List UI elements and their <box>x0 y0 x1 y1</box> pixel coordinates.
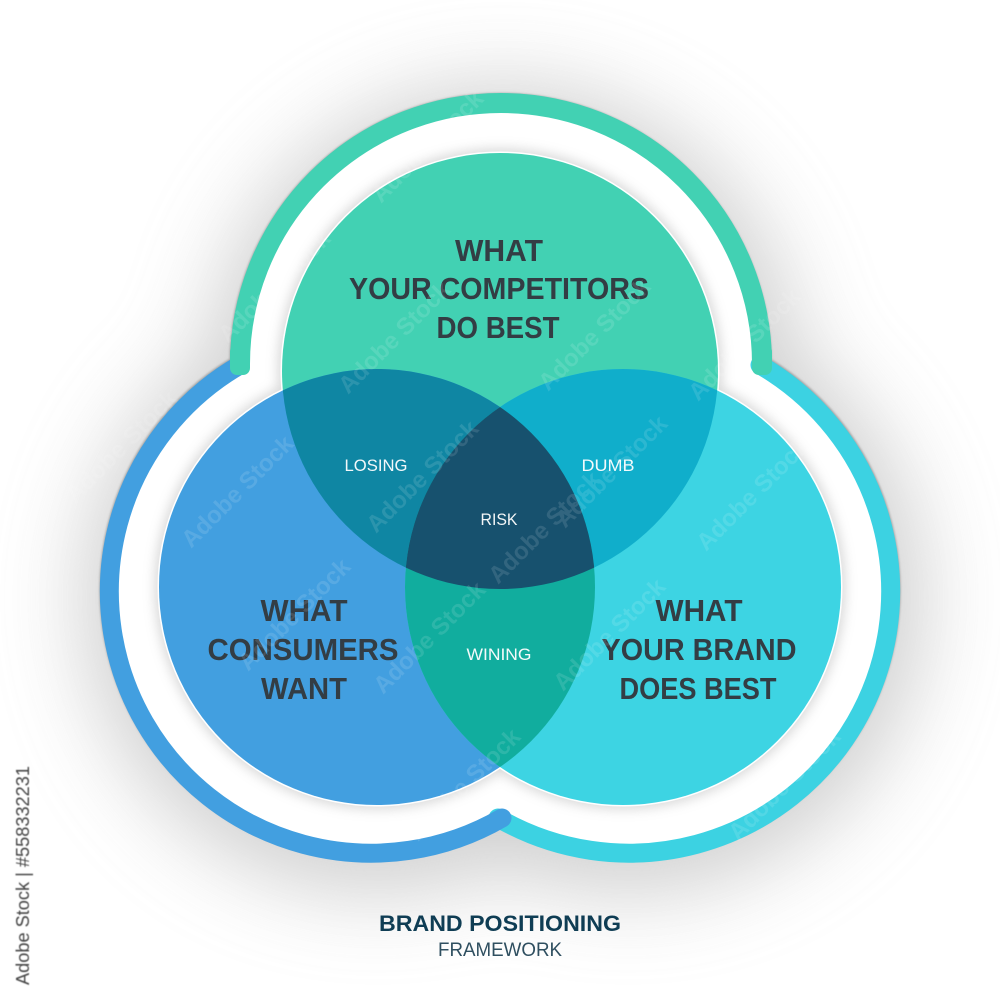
watermark pattern: Adobe Stock <box>548 573 672 696</box>
inner circle shadows <box>155 149 845 809</box>
heading: what your brand does best: YOUR BRAND <box>602 632 796 667</box>
heading: what your brand does best: WHAT <box>656 593 743 628</box>
overlap labels: RISK <box>480 510 518 529</box>
overlap: risk <box>406 407 594 589</box>
watermark pattern: Adobe Stock <box>368 576 492 699</box>
subtitle: FRAMEWORK <box>438 940 562 961</box>
heading: what consumers want: WANT <box>261 671 347 706</box>
watermark pattern: Adobe Stock <box>233 553 357 676</box>
overlap labels: WINING <box>466 645 532 664</box>
overlap labels: LOSING <box>344 456 408 475</box>
watermark id: Adobe Stock | #558332231 <box>13 766 33 985</box>
watermark pattern: Adobe Stock <box>403 723 527 846</box>
heading: what your competitors do best: WHAT <box>455 233 543 268</box>
inner circle white outlines <box>158 152 842 806</box>
watermark pattern: Adobe Stock <box>361 415 485 538</box>
watermark pattern: Adobe Stock <box>333 276 457 399</box>
circle: what your competitors do best <box>282 153 718 589</box>
watermark pattern: Adobe Stock <box>723 723 847 846</box>
heading: what your brand does best <box>602 593 796 706</box>
overlap: dumb <box>500 369 718 568</box>
heading: what consumers want: CONSUMERS <box>208 632 398 667</box>
circle: what consumers want <box>159 369 595 805</box>
watermark pattern: Adobe Stock <box>366 85 490 208</box>
watermark pattern: Adobe Stock <box>483 466 607 589</box>
watermark pattern: Adobe Stock <box>213 225 337 348</box>
overlap: wining <box>405 407 595 767</box>
watermark pattern: Adobe Stock <box>683 283 807 406</box>
overlap: losing <box>282 369 500 568</box>
heading: what consumers want: WHAT <box>260 593 348 628</box>
ring edge shadow <box>100 93 900 860</box>
ring: right cyan <box>498 365 891 853</box>
white base plate <box>109 102 891 851</box>
heading: what your competitors do best: YOUR COMPETITORS <box>349 271 649 306</box>
overlap labels: DUMB <box>582 456 634 475</box>
circle: what your brand does best <box>405 369 841 805</box>
heading: what consumers want <box>208 593 398 706</box>
heading: what your competitors do best: DO BEST <box>436 310 560 345</box>
ring: top green <box>230 103 772 375</box>
watermark pattern: Adobe Stock <box>60 385 184 508</box>
title: BRAND POSITIONING <box>379 911 621 936</box>
ring: left blue <box>109 365 502 853</box>
overlap labels <box>344 456 634 664</box>
watermark pattern: Adobe Stock <box>176 430 300 553</box>
watermark pattern <box>60 85 847 846</box>
heading: what your competitors do best <box>349 233 649 345</box>
background shadow <box>82 84 924 894</box>
watermark pattern: Adobe Stock <box>550 410 674 533</box>
watermark pattern: Adobe Stock <box>180 91 304 214</box>
watermark pattern: Adobe Stock <box>533 273 657 396</box>
heading: what your brand does best: DOES BEST <box>620 671 777 706</box>
watermark pattern: Adobe Stock <box>691 433 815 556</box>
